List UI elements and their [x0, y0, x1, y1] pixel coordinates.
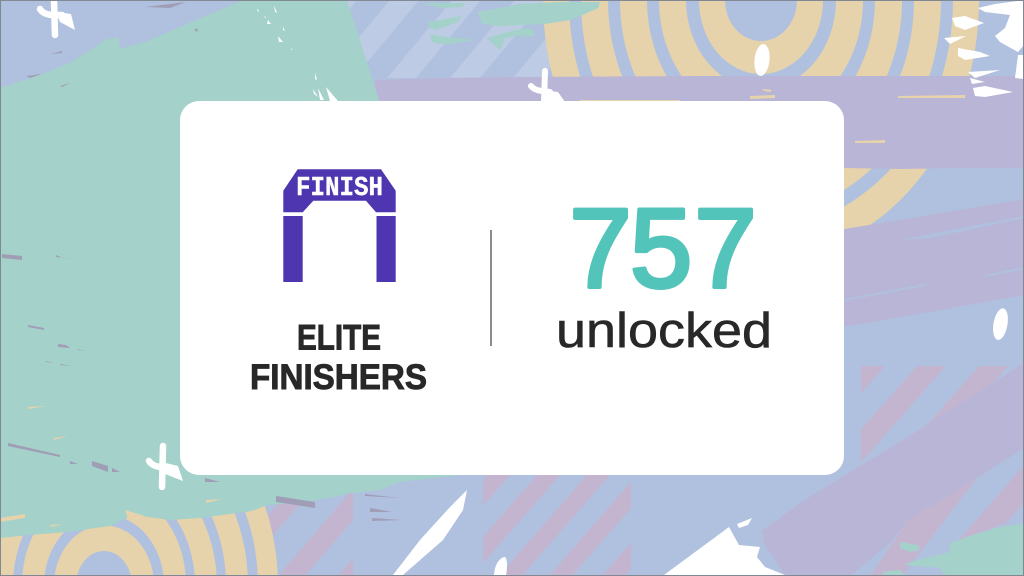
background: tan flecks in purple — [580, 89, 965, 143]
background: white splatter top right — [944, 0, 1024, 97]
background: tan specks on green — [0, 406, 222, 527]
stat: 757: 757 — [569, 186, 757, 311]
background: white flecks — [257, 5, 338, 101]
background: green brush lower right — [883, 523, 1024, 576]
background: green brush patches top — [422, 2, 600, 50]
label: unlocked: unlocked — [556, 304, 772, 358]
background: grey and tan specks — [2, 2, 402, 521]
heading: elite finishers — [250, 318, 427, 397]
background: white splash bottom right — [664, 518, 785, 575]
background: white splash bottom centre — [393, 490, 467, 575]
icon: white blob top — [753, 43, 771, 77]
icon: finish arch: FINISH — [296, 174, 383, 204]
icon: white x mark top centre — [531, 71, 565, 102]
icon: white x mark top left — [40, 0, 75, 35]
background: green brush main — [0, 0, 460, 538]
heading: elite finishers: ELITE — [297, 318, 381, 358]
icon: white x mark bottom left — [149, 446, 183, 487]
icon: finish arch — [283, 169, 396, 282]
background: concentric arcs bottom — [0, 378, 278, 576]
background: pink stripes right — [861, 366, 1008, 462]
background: purple brush bands — [375, 76, 1024, 576]
icon: white blob bottom — [494, 557, 507, 576]
background: pink panels lower right — [870, 465, 1024, 576]
heading: elite finishers: FINISHERS — [250, 358, 427, 397]
background: pink stripes bottom left — [268, 493, 353, 575]
panel: white card — [180, 101, 844, 475]
background: concentric arcs top — [543, 0, 979, 260]
icon: white blob right — [991, 307, 1010, 341]
divider — [490, 230, 492, 346]
background: blue streaks in purple — [844, 216, 1024, 301]
background: pink stripes bottom centre — [483, 475, 631, 575]
background: light stripes top — [348, 1, 550, 78]
